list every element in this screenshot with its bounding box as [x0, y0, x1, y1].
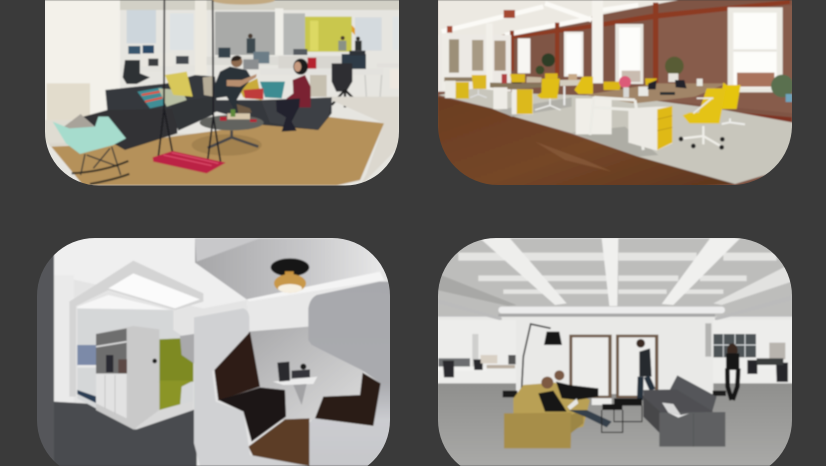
floor: [54, 402, 197, 466]
ceiling: [53, 238, 247, 308]
right large panel: [308, 282, 393, 466]
left wall and glazed doors: [438, 35, 511, 92]
left booth panel: [194, 308, 308, 466]
laptop: [662, 403, 681, 415]
walking woman: [726, 343, 739, 400]
coffee table: [200, 115, 264, 130]
pod frame: [69, 261, 203, 397]
seated woman: [283, 75, 311, 107]
ceiling: [438, 0, 678, 36]
ducts: [498, 307, 725, 313]
photo: white open office with sofas and whiteboards: [430, 230, 800, 466]
upper ceiling fixture panel: [194, 238, 356, 300]
photo: lounge with swing and sofa: [45, 0, 399, 186]
standing people: [247, 38, 255, 53]
small table and laptop: [273, 377, 317, 385]
plants: [542, 53, 555, 67]
red skirting: [744, 112, 792, 122]
photo: brick loft open office with yellow chairs: [438, 0, 792, 185]
centre wall: [516, 317, 713, 394]
yellow sofa: [513, 383, 590, 430]
seated men: [556, 382, 598, 400]
carpet: [438, 88, 793, 184]
glass interior: [78, 308, 194, 409]
swing: [158, 0, 221, 168]
main beams: [480, 238, 567, 305]
booth carpet: [248, 418, 309, 466]
front yellow chair: [722, 82, 742, 110]
left desks: [444, 77, 474, 81]
desks: [120, 65, 195, 72]
front desk: [584, 83, 727, 103]
seated man: [214, 67, 252, 113]
columns: [592, 0, 603, 83]
phones and laptop: [648, 80, 657, 89]
middle desks: [490, 83, 542, 89]
floor: [437, 383, 793, 466]
whiteboards: [569, 335, 612, 398]
back wall of booth: [247, 280, 385, 332]
ceiling: [437, 238, 793, 317]
left textured wall: [37, 254, 56, 462]
red beams: [507, 0, 790, 39]
desks at right: [746, 365, 793, 369]
bookshelf block: [96, 326, 159, 429]
man at whiteboard: [636, 339, 653, 400]
windows: [518, 38, 530, 73]
rocking chair: [53, 117, 126, 154]
chairs: [123, 60, 150, 84]
flowers: [619, 76, 631, 88]
green seat: [159, 338, 193, 383]
wood floor: [438, 96, 732, 185]
grey sofa: [670, 375, 717, 413]
brick wall: [723, 108, 724, 109]
floor: [323, 97, 399, 187]
desks at left: [438, 358, 470, 367]
rug: [51, 116, 384, 185]
photo: white office pods with seating booths: [30, 230, 400, 466]
left back wall: [54, 275, 74, 405]
cushions: [137, 87, 165, 108]
side rooms: [437, 320, 517, 385]
floor lamp: [522, 324, 551, 388]
tables: [592, 398, 612, 405]
sofa: [105, 75, 332, 130]
booth dark seats: [214, 332, 260, 401]
lamp: [271, 258, 309, 276]
